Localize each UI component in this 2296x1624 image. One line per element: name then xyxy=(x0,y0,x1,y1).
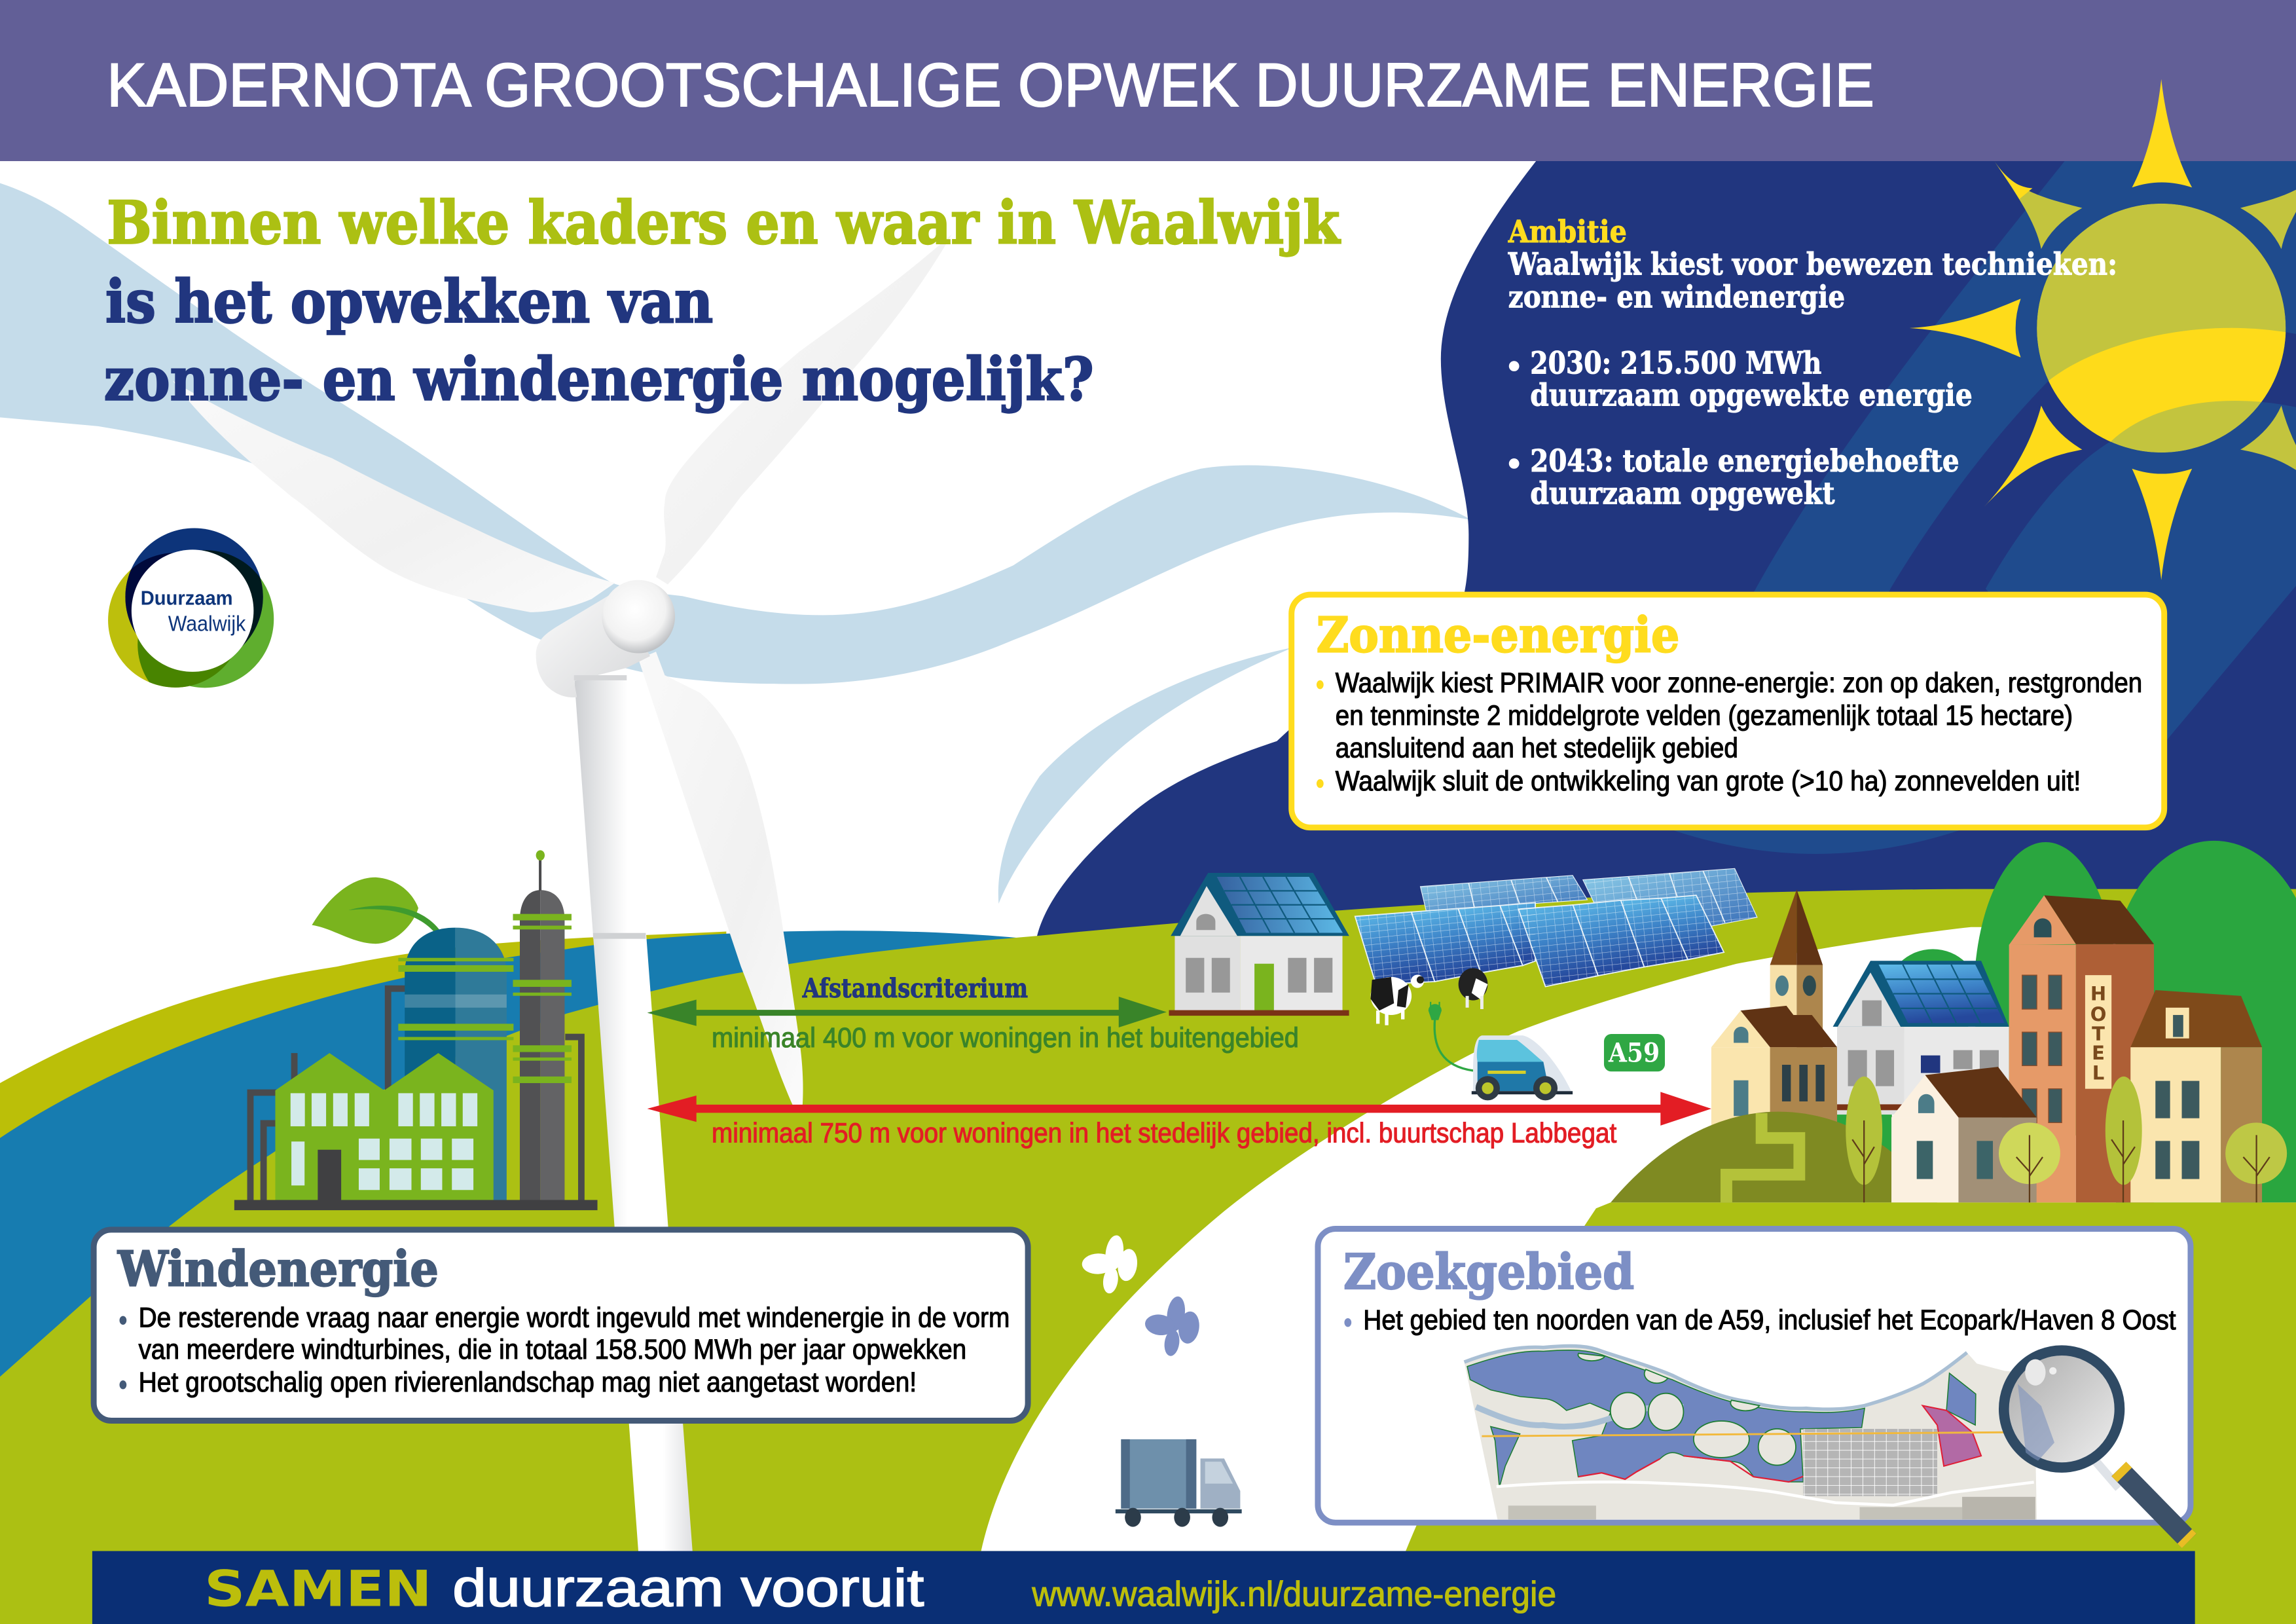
green arrow xyxy=(647,997,1167,1027)
olive rays xyxy=(1994,161,2296,507)
footer text: www.waalwijk.nl/duurzame-energie xyxy=(1031,1574,1556,1614)
olive river bank xyxy=(0,931,726,1172)
white road xyxy=(981,927,2296,1551)
panel: windenergie: Het grootschalig open rivierenlandschap mag niet aangetast worden! xyxy=(139,1367,917,1398)
hotel sign: H xyxy=(2090,983,2106,1005)
panel: zonne-energie: en tenminste 2 middelgrote velden (gezamenlijk totaal 15 hectare) xyxy=(1336,701,2073,731)
logo Duurzaam Waalwijk: Duurzaam xyxy=(141,588,233,610)
church xyxy=(1770,889,1823,1155)
trees behind village xyxy=(1836,841,2296,1202)
hill with path xyxy=(1611,1112,1937,1202)
factory xyxy=(234,850,598,1210)
panel: windenergie: De resterende vraag naar energie wordt ingevuld met windenergie in de vorm xyxy=(139,1302,1010,1333)
sun xyxy=(1910,79,2296,580)
butterfly white xyxy=(1077,1231,1141,1297)
dark blue sky xyxy=(1037,161,2296,967)
panel: zonne-energie: Waalwijk kiest PRIMAIR voor zonne-energie: zon op daken, restgronden xyxy=(1336,668,2142,699)
ambition text: duurzaam opgewekte energie xyxy=(1530,378,1973,414)
turbine tower xyxy=(574,675,693,1553)
butterfly blue xyxy=(1141,1293,1203,1359)
panel: zoekgebied xyxy=(1318,1229,2191,1522)
cow 2 xyxy=(1459,968,1487,1009)
factory base xyxy=(234,1200,598,1210)
village xyxy=(1611,841,2296,1202)
lighter blue sky stripes xyxy=(1669,161,2296,854)
green field xyxy=(0,889,2296,1624)
panel: zonne-energie: aansluitend aan het stedelijk gebied xyxy=(1336,733,1738,764)
river xyxy=(0,931,1042,1384)
left house xyxy=(1711,1006,1837,1164)
footer text xyxy=(204,1559,1556,1617)
sun disc xyxy=(2037,203,2286,453)
truck xyxy=(1116,1439,1242,1527)
750 m label: minimaal 750 m voor woningen in het stedelijk gebied, incl. buurtschap Labbegat xyxy=(712,1118,1616,1149)
magnifying glass xyxy=(2004,1350,2189,1541)
factory building xyxy=(275,1053,494,1200)
front panels xyxy=(1355,895,1724,987)
ambition text xyxy=(1508,214,2117,511)
map: industrial area xyxy=(1803,1429,1937,1496)
logo Duurzaam Waalwijk: Waalwijk xyxy=(168,612,246,636)
hub xyxy=(602,580,675,654)
hotel sign: L xyxy=(2092,1061,2104,1084)
footer text: SAMEN xyxy=(204,1559,432,1617)
blade left xyxy=(173,381,615,612)
wind turbine xyxy=(173,234,952,1553)
green bands xyxy=(398,914,572,1083)
400 m label: minimaal 400 m voor woningen in het buitengebied xyxy=(712,1023,1299,1054)
hotel sign: E xyxy=(2092,1042,2105,1064)
pipes xyxy=(250,989,581,1201)
heading: is het opwekken van xyxy=(105,268,713,337)
nacelle xyxy=(536,592,650,697)
right house xyxy=(2130,990,2262,1202)
hotel sign: T xyxy=(2092,1023,2105,1045)
panel: zonne-energie: Waalwijk sluit de ontwikkeling van grote (>10 ha) zonnevelden uit! xyxy=(1336,766,2081,797)
panel: zonne-energie xyxy=(1292,595,2164,828)
ambition text: duurzaam opgewekt xyxy=(1530,475,1835,511)
panel: zoekgebied: Het gebied ten noorden van de A59, inclusief het Ecopark/Haven 8 Oost xyxy=(1363,1305,2176,1336)
header band xyxy=(0,0,2296,161)
farmhouse xyxy=(1169,873,1349,1016)
distance criterion label: Afstandscriterium xyxy=(802,973,1028,1004)
back panels xyxy=(1421,868,1757,926)
tower stack xyxy=(520,890,540,1200)
map: eastern area xyxy=(1946,1373,1976,1425)
heading: zonne- en windenergie mogelijk? xyxy=(104,346,1094,415)
distance arrows xyxy=(647,973,1711,1149)
electric car xyxy=(1472,1035,1573,1100)
footer text: duurzaam vooruit xyxy=(452,1559,924,1617)
panel: zonne-energie: Zonne-energie xyxy=(1317,607,1679,663)
logo Duurzaam Waalwijk xyxy=(108,528,274,688)
ambition text: zonne- en windenergie xyxy=(1508,280,1845,316)
charging cable xyxy=(1429,1002,1473,1071)
A59 road badge: A59 xyxy=(1608,1038,1660,1069)
hotel sign: O xyxy=(2090,1003,2106,1025)
ambition text: 2030: 215.500 MWh xyxy=(1530,345,1821,381)
panel: windenergie: Windenergie xyxy=(117,1241,439,1297)
leaf xyxy=(312,877,418,944)
hotel xyxy=(2009,895,2154,1202)
ambition text: 2043: totale energiebehoefte xyxy=(1530,443,1959,479)
front house xyxy=(1891,1067,2037,1202)
panel: windenergie xyxy=(94,1230,1028,1421)
panel: zoekgebied: Zoekgebied xyxy=(1343,1244,1634,1301)
blade upper xyxy=(656,234,952,584)
tank xyxy=(405,928,456,1200)
heading: Binnen welke kaders en waar in Waalwijk xyxy=(107,189,1341,257)
map: sliver xyxy=(1491,1426,1520,1487)
map: Ecopark xyxy=(1923,1405,1981,1466)
panel: windenergie: van meerdere windturbines, die in totaal 158.500 MWh per jaar opwekken xyxy=(139,1335,966,1365)
middle house with solar panels xyxy=(1833,961,2009,1115)
wind swoosh xyxy=(0,183,1472,904)
map: search area xyxy=(1467,1350,1865,1482)
map xyxy=(1465,1346,2051,1519)
sun rays xyxy=(1910,79,2192,580)
solar field xyxy=(1355,868,1757,987)
village trees xyxy=(1846,1077,2287,1202)
blade lower xyxy=(638,652,803,1107)
cows xyxy=(1370,968,1487,1025)
cow 1 xyxy=(1370,974,1424,1025)
ambition text: Waalwijk kiest voor bewezen technieken: xyxy=(1508,246,2117,282)
title: KADERNOTA GROOTSCHALIGE OPWEK DUURZAME ENERGIE xyxy=(107,50,1874,119)
footer band xyxy=(92,1551,2195,1624)
ambition text: Ambitie xyxy=(1508,214,1627,250)
red arrow xyxy=(647,1092,1711,1126)
hotel sign xyxy=(2085,975,2111,1089)
heading xyxy=(104,189,1341,415)
